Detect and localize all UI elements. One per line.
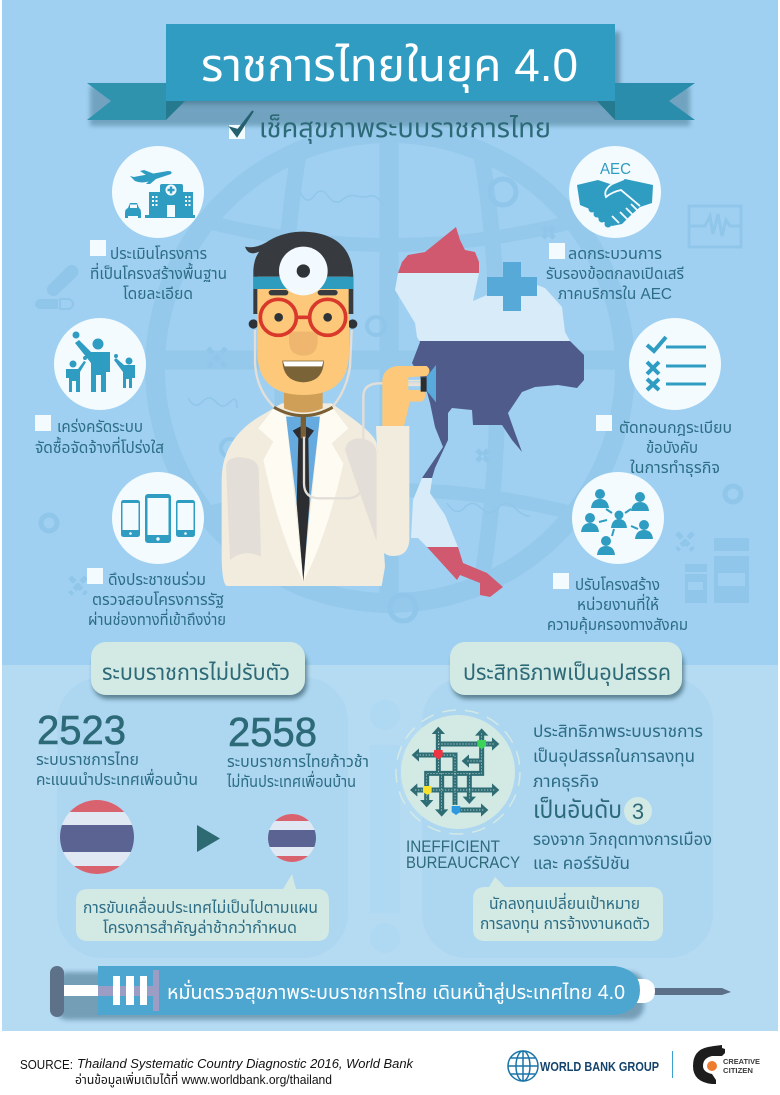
- text block: ranking: ประสิทธิภาพระบบราชการ: [533, 722, 703, 741]
- source text: Thailand Systematic Country Diagnostic 2016, World Bank: [77, 1056, 414, 1071]
- panel: right backdrop: [422, 677, 713, 958]
- source text: SOURCE:: [20, 1057, 73, 1072]
- headband: [253, 277, 353, 289]
- text: ลดกระบวนการ: [568, 246, 662, 263]
- panel: left backdrop: [57, 677, 348, 958]
- text: [88, 571, 226, 629]
- logo: World Bank Group: [508, 1051, 659, 1081]
- checkbox: [90, 240, 106, 256]
- icon: plane, car, hospital: [125, 170, 195, 218]
- icon: medical plus: [487, 262, 537, 311]
- icon: people network: [581, 489, 653, 555]
- maze caption: [406, 837, 520, 872]
- text: เคร่งครัดระบบ: [57, 418, 143, 436]
- decoration: info i: [370, 700, 400, 953]
- text block: ranking: เป็นอุปสรรคในการลงทุน: [533, 747, 695, 767]
- stat: 2523: [36, 707, 198, 789]
- left item 1: infrastructure: [90, 146, 227, 303]
- text: โดยละเอียด: [123, 286, 193, 303]
- background: upper section: [2, 0, 778, 665]
- text: [546, 246, 684, 303]
- text: ที่เป็นโครงสร้างพื้นฐาน: [90, 262, 227, 283]
- subtitle with check mark: เช็คสุขภาพระบบราชการไทย: [259, 113, 551, 144]
- stat: 2558: ไม่ทันประเทศเพื่อนบ้าน: [226, 770, 356, 791]
- text: ปรับโครงสร้าง: [575, 577, 660, 594]
- hair: [245, 232, 353, 314]
- stat: 2523: ระบบราชการไทย: [36, 752, 139, 769]
- source text: [20, 1056, 414, 1087]
- checkbox: [549, 243, 565, 259]
- maze caption: INEFFICIENT: [406, 837, 500, 856]
- heading pill: right: [450, 642, 684, 699]
- text: ตรวจสอบโครงการรัฐ: [92, 592, 224, 609]
- text: ความคุ้มครองทางสังคม: [547, 617, 688, 634]
- text: [547, 577, 688, 634]
- decoration: ECG monitor: [689, 206, 741, 247]
- callout: left: [76, 874, 329, 941]
- icon: people with raised hands: [66, 332, 135, 392]
- title ribbon: [87, 24, 695, 126]
- stat: 2523: คะแนนนำประเทศเพื่อนบ้าน: [36, 768, 198, 789]
- icon: mobile devices: [121, 494, 195, 543]
- text: จัดซื้อจัดจ้างที่โปร่งใส: [35, 436, 164, 457]
- footer background: [0, 1031, 780, 1095]
- text: หน่วยงานที่ให้: [577, 593, 659, 614]
- head: [249, 319, 258, 329]
- left item 2: procurement: [35, 318, 164, 457]
- icon: AEC handshake: [577, 161, 653, 228]
- callout: left: โครงการสำคัญล่าช้ากว่ากำหนด: [103, 919, 297, 937]
- callout: right: การลงทุน การจ้างงานหดตัว: [480, 916, 650, 933]
- nose: [289, 332, 318, 356]
- mouth: [282, 361, 324, 382]
- text: ประเมินโครงการ: [110, 246, 207, 263]
- map of Thailand in flag colours: [395, 227, 584, 597]
- checkbox: [596, 415, 612, 431]
- callout: right: [473, 877, 663, 941]
- decoration: rings and waves: [41, 179, 741, 621]
- text block: ranking: รองจาก วิกฤตทางการเมือง: [533, 830, 712, 849]
- stat: 2558: ระบบราชการไทยก้าวช้า: [227, 754, 369, 771]
- doctor illustration: [222, 232, 436, 586]
- text: [35, 418, 164, 457]
- arrow: [197, 825, 220, 852]
- text: ในการทำธุรกิจ: [630, 460, 720, 477]
- checkbox: [87, 568, 103, 584]
- text: [90, 246, 227, 303]
- text block: ranking: [533, 722, 712, 873]
- heading pill: left: [91, 642, 307, 699]
- logo: World Bank Group: WORLD BANK GROUP: [540, 1059, 659, 1074]
- neck: [284, 387, 323, 412]
- text: ข้อบังคับ: [646, 440, 698, 457]
- plunger: [50, 966, 64, 1017]
- text block: ranking: 3: [632, 799, 644, 824]
- text: ดึงประชาชนร่วม: [108, 571, 206, 589]
- text block: ranking: เป็นอันดับ: [533, 796, 622, 824]
- checkbox: [553, 573, 569, 589]
- stethoscope tube: [304, 383, 423, 498]
- text: ผ่านช่องทางที่เข้าถึงง่าย: [88, 608, 226, 629]
- sleeve: [376, 426, 409, 556]
- stat: 2523: 2523: [37, 707, 126, 753]
- right item 3: social protection: [547, 472, 688, 634]
- text block: ranking: ภาคธุรกิจ: [533, 772, 599, 792]
- decoration: pills: [35, 265, 78, 309]
- stat: 2558: 2558: [228, 709, 317, 755]
- head mirror: [279, 247, 328, 295]
- text: ภาคบริการใน AEC: [558, 286, 672, 303]
- right item 1: AEC: [546, 146, 684, 303]
- hand: [382, 366, 429, 426]
- text: ตัดทอนกฎระเบียบ: [619, 420, 732, 437]
- shirt: [286, 417, 320, 580]
- divider: [672, 1051, 673, 1078]
- checkbox: [35, 415, 51, 431]
- icon: large Thai flag: [60, 800, 134, 874]
- syringe banner: [50, 966, 731, 1020]
- lapels: [258, 407, 303, 582]
- maze caption: BUREAUCRACY: [406, 853, 520, 872]
- eyebrows: [269, 290, 288, 295]
- glasses: [260, 299, 346, 335]
- tie: [293, 425, 314, 582]
- heading pill: right: ประสิทธิภาพเป็นอุปสรรค: [463, 660, 671, 686]
- text block: ranking: และ คอร์รัปชัน: [533, 854, 630, 873]
- icon: small Thai flag: [268, 814, 316, 862]
- stat: 2558: [226, 709, 369, 791]
- logo: Creative Citizen: [693, 1045, 760, 1084]
- syringe banner: หมั่นตรวจสุขภาพระบบราชการไทย เดินหน้าสู่ประเทศไทย 4.0: [167, 979, 625, 1005]
- needle: [650, 988, 731, 995]
- logo: Creative Citizen: CITIZEN: [723, 1066, 753, 1075]
- background: lower section: [2, 665, 778, 1031]
- heading pill: left: ระบบราชการไม่ปรับตัว: [102, 660, 290, 685]
- right item 2: regulations: [596, 318, 732, 477]
- icon: inefficient bureaucracy maze: [396, 710, 520, 834]
- source text: อ่านข้อมูลเพิ่มเติมได้ที่ www.worldbank.org/thailand: [75, 1071, 332, 1087]
- syringe tip: [636, 979, 655, 1003]
- text: รับรองข้อตกลงเปิดเสรี: [546, 266, 684, 283]
- text: [619, 420, 732, 477]
- icon: AEC handshake: AEC: [600, 161, 631, 178]
- icon: checklist: [647, 337, 706, 390]
- background globe decoration: [146, 126, 634, 613]
- callout: right: นักลงทุนเปลี่ยนเป้าหมาย: [489, 892, 640, 913]
- barrel: [98, 966, 640, 1015]
- logo: Creative Citizen: CREATIVE: [723, 1057, 760, 1066]
- callout: left: การขับเคลื่อนประเทศไม่เป็นไปตามแผน: [83, 896, 318, 917]
- left item 3: citizen participation: [87, 472, 226, 629]
- title text: ราชการไทยในยุค 4.0: [201, 39, 578, 93]
- decoration: medicine jars: [685, 538, 749, 603]
- coat: [222, 403, 385, 586]
